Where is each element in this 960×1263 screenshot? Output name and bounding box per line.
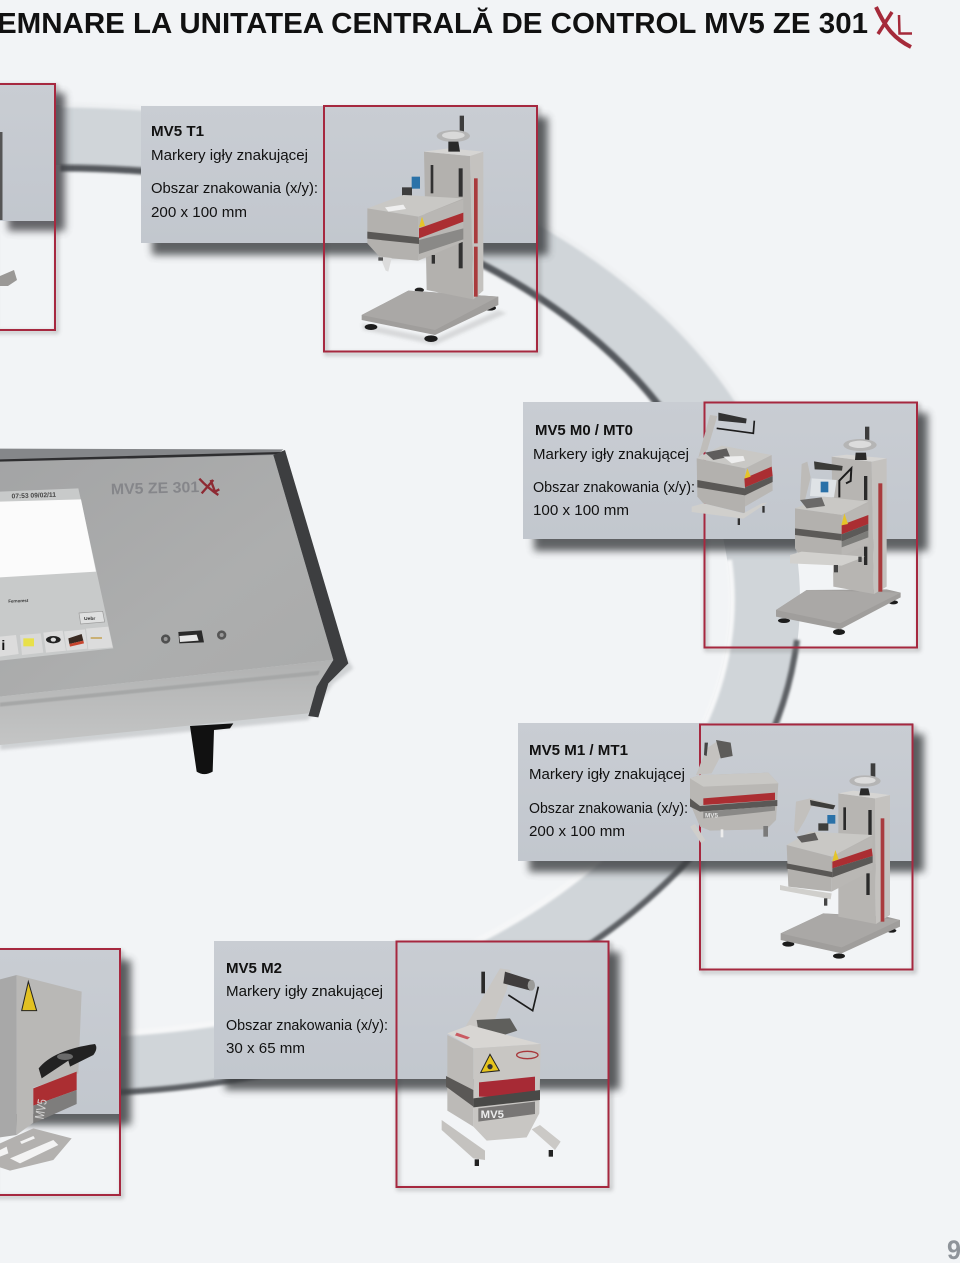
text: MV5 M1 / MT1: [529, 743, 688, 840]
text: MV5 T1: 200 x 100 mm: [151, 205, 247, 221]
panel: MV5 M0 / MT0: [523, 402, 928, 650]
connecting ring: [0, 105, 800, 1095]
frame: [700, 724, 912, 970]
machine T1: [362, 116, 507, 345]
text: MV5 T1: Obszar znakowania (x/y):: [151, 181, 318, 197]
text: MV5 M1 / MT1: Obszar znakowania (x/y):: [529, 801, 688, 817]
text: MV5 M1 / MT1: MV5 M1 / MT1: [529, 743, 628, 759]
icon: XL logo: [876, 7, 912, 47]
portable head M0: [692, 413, 773, 525]
text: MV5 M2: 30 x 65 mm: [226, 1041, 305, 1057]
text: MV5 M0 / MT0: MV5 M0 / MT0: [535, 423, 633, 439]
text: MV5 M0 / MT0: [533, 423, 695, 519]
portable head M1: [690, 740, 778, 843]
touch screen: 07:53 09/02/11: [11, 492, 56, 500]
panel left top: cropped machine: [0, 84, 65, 332]
title: EMNARE LA UNITATEA CENTRALĂ DE CONTROL MV5 ZE 301: [0, 7, 868, 40]
machine M2: [442, 968, 561, 1166]
panel: MV5 T1: [141, 106, 548, 354]
machine M1: [690, 740, 900, 959]
device logo: MV5 ZE 301: [111, 479, 200, 498]
frame: [704, 402, 917, 648]
text: MV5 T1: Markery igły znakującej: [151, 148, 308, 164]
text: MV5 M0 / MT0: Obszar znakowania (x/y):: [533, 480, 695, 496]
touch screen: Uebr: [84, 616, 95, 622]
touch screen: i: [1, 637, 5, 653]
text: MV5 M2: Markery igły znakującej: [226, 984, 383, 1000]
text: MV5 M0 / MT0: Markery igły znakującej: [533, 447, 689, 463]
text: MV5 T1: [151, 124, 318, 221]
text: MV5 M0 / MT0: 100 x 100 mm: [533, 503, 629, 519]
text: MV5 M2: [226, 961, 388, 1057]
text: MV5 T1: MV5 T1: [151, 124, 204, 140]
touch screen: Fernorest: [8, 598, 29, 604]
machine MV5 side view: [0, 975, 96, 1171]
machine M2: MV5: [481, 1109, 504, 1121]
panel: MV5 M1 / MT1: [518, 723, 924, 972]
touch screen: [0, 488, 113, 661]
panel: MV5 M2: [214, 941, 620, 1189]
frame: [396, 942, 608, 1187]
text: MV5 M2: Obszar znakowania (x/y):: [226, 1018, 388, 1034]
machine MV5 side view: MV5: [33, 1098, 50, 1120]
text: MV5 M1 / MT1: 200 x 100 mm: [529, 824, 625, 840]
text: MV5 M1 / MT1: Markery igły znakującej: [529, 767, 685, 783]
machine M0: [692, 413, 901, 635]
text: MV5 M2: MV5 M2: [226, 961, 282, 977]
frame: [324, 106, 537, 352]
USB port and screws: [161, 630, 226, 644]
panel left bottom: cropped machine: [0, 949, 131, 1197]
foot: [190, 723, 233, 774]
portable head M1: MV5: [705, 812, 718, 819]
control unit MV5 ZE 301 XL: [0, 449, 353, 774]
